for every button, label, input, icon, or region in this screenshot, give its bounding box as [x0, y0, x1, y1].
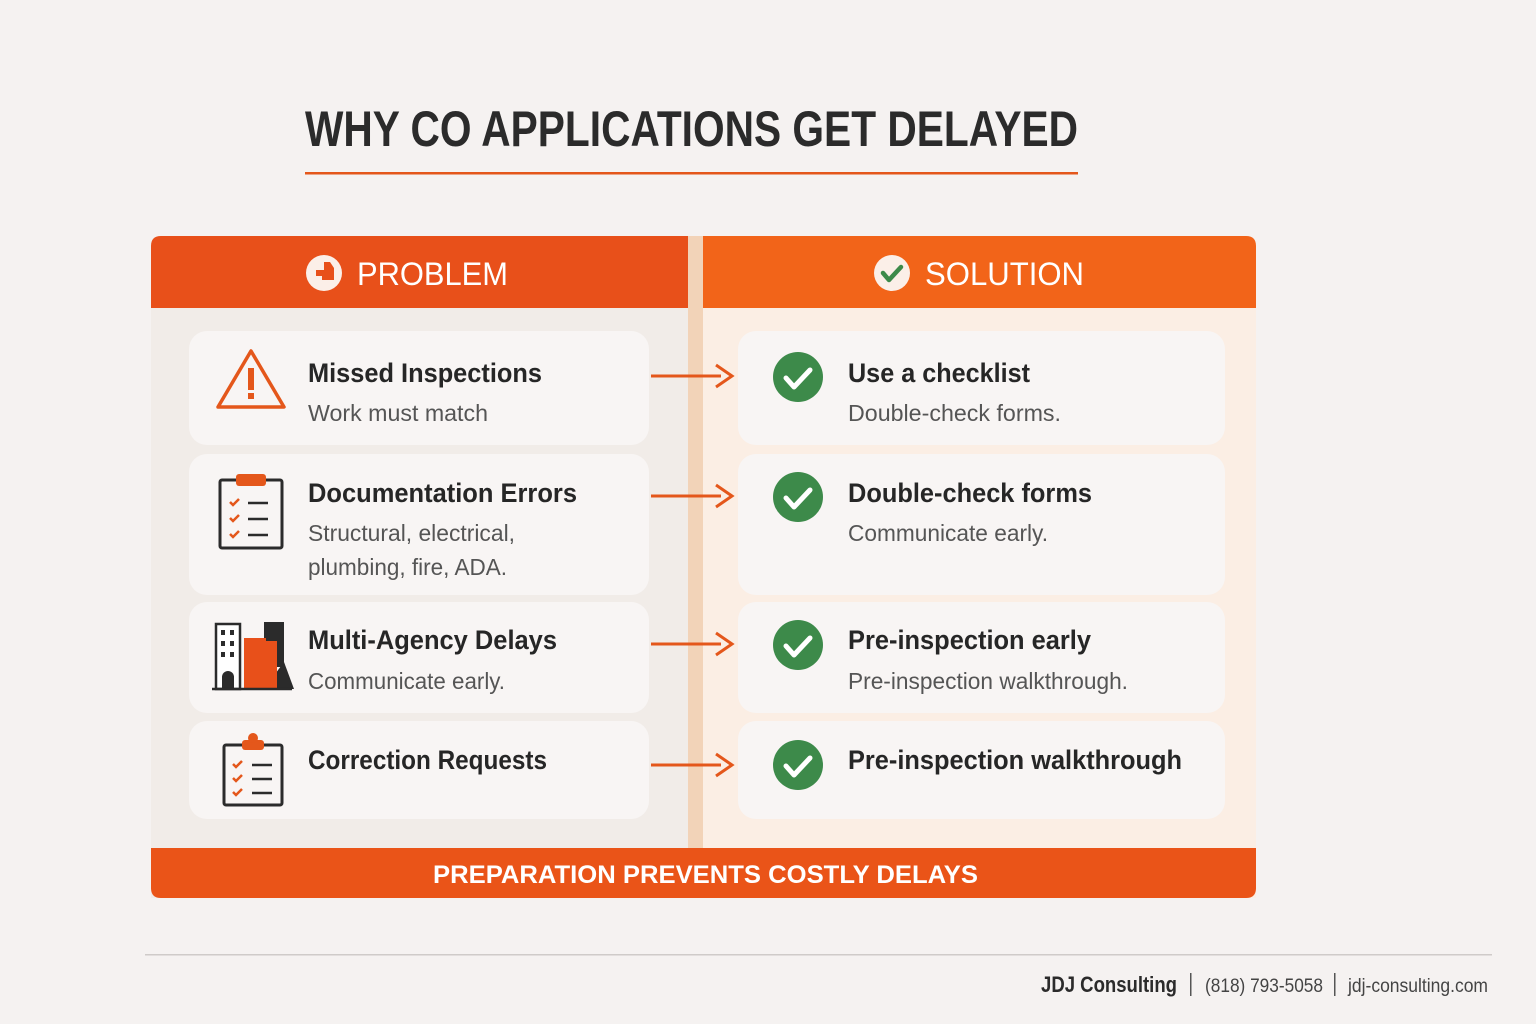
card: pre-inspection walkthrough: Pre-inspection walkthrough	[848, 745, 1182, 775]
heading: problem: PROBLEM	[357, 256, 508, 292]
icon: check	[773, 740, 823, 790]
panel: solution column	[703, 236, 1256, 898]
footer banner	[151, 848, 1256, 898]
card: missed inspections: Work must match	[308, 400, 488, 426]
card: multi-agency delays: Multi-Agency Delays	[308, 625, 557, 655]
card: pre-inspection early: Pre-inspection early	[848, 625, 1091, 655]
footer: company info: (818) 793-5058	[1205, 976, 1323, 997]
card: correction requests: Correction Requests	[308, 745, 547, 775]
card: missed inspections: Missed Inspections	[308, 358, 542, 388]
heading: solution: SOLUTION	[925, 256, 1084, 292]
card: documentation errors	[189, 454, 649, 595]
card: documentation errors: plumbing, fire, ADA.	[308, 554, 507, 580]
arrows	[651, 365, 732, 776]
card: use a checklist: Double-check forms.	[848, 400, 1061, 426]
heading: solution	[703, 236, 1256, 308]
card: pre-inspection walkthrough	[738, 721, 1225, 819]
card: multi-agency delays	[189, 602, 649, 713]
card: double-check forms: Communicate early.	[848, 520, 1048, 546]
card: documentation errors: Documentation Errors	[308, 478, 577, 508]
icon: warning	[218, 351, 284, 407]
footer: company info: jdj-consulting.com	[1347, 976, 1488, 997]
card: pre-inspection early: Pre-inspection walkthrough.	[848, 668, 1128, 694]
icon: buildings	[212, 622, 294, 689]
card: double-check forms: Double-check forms	[848, 478, 1092, 508]
heading: problem	[151, 236, 688, 308]
card: correction requests	[189, 721, 649, 819]
footer banner: PREPARATION PREVENTS COSTLY DELAYS	[433, 861, 978, 889]
card: use a checklist: Use a checklist	[848, 358, 1030, 388]
title: WHY CO APPLICATIONS GET DELAYED	[305, 101, 1078, 157]
divider	[688, 236, 703, 856]
icon: clipboard 2	[224, 733, 282, 805]
card: multi-agency delays: Communicate early.	[308, 668, 505, 694]
card: use a checklist	[738, 331, 1225, 445]
footer: company info: JDJ Consulting	[1041, 972, 1177, 997]
card: missed inspections	[189, 331, 649, 445]
icon: check	[773, 620, 823, 670]
card: documentation errors: Structural, electrical,	[308, 520, 515, 546]
footer: company info	[1041, 972, 1488, 997]
icon: check	[773, 472, 823, 522]
icon: clipboard	[220, 474, 282, 548]
card: double-check forms	[738, 454, 1225, 595]
panel: problem column	[151, 236, 688, 898]
card: pre-inspection early	[738, 602, 1225, 713]
icon: check	[773, 352, 823, 402]
